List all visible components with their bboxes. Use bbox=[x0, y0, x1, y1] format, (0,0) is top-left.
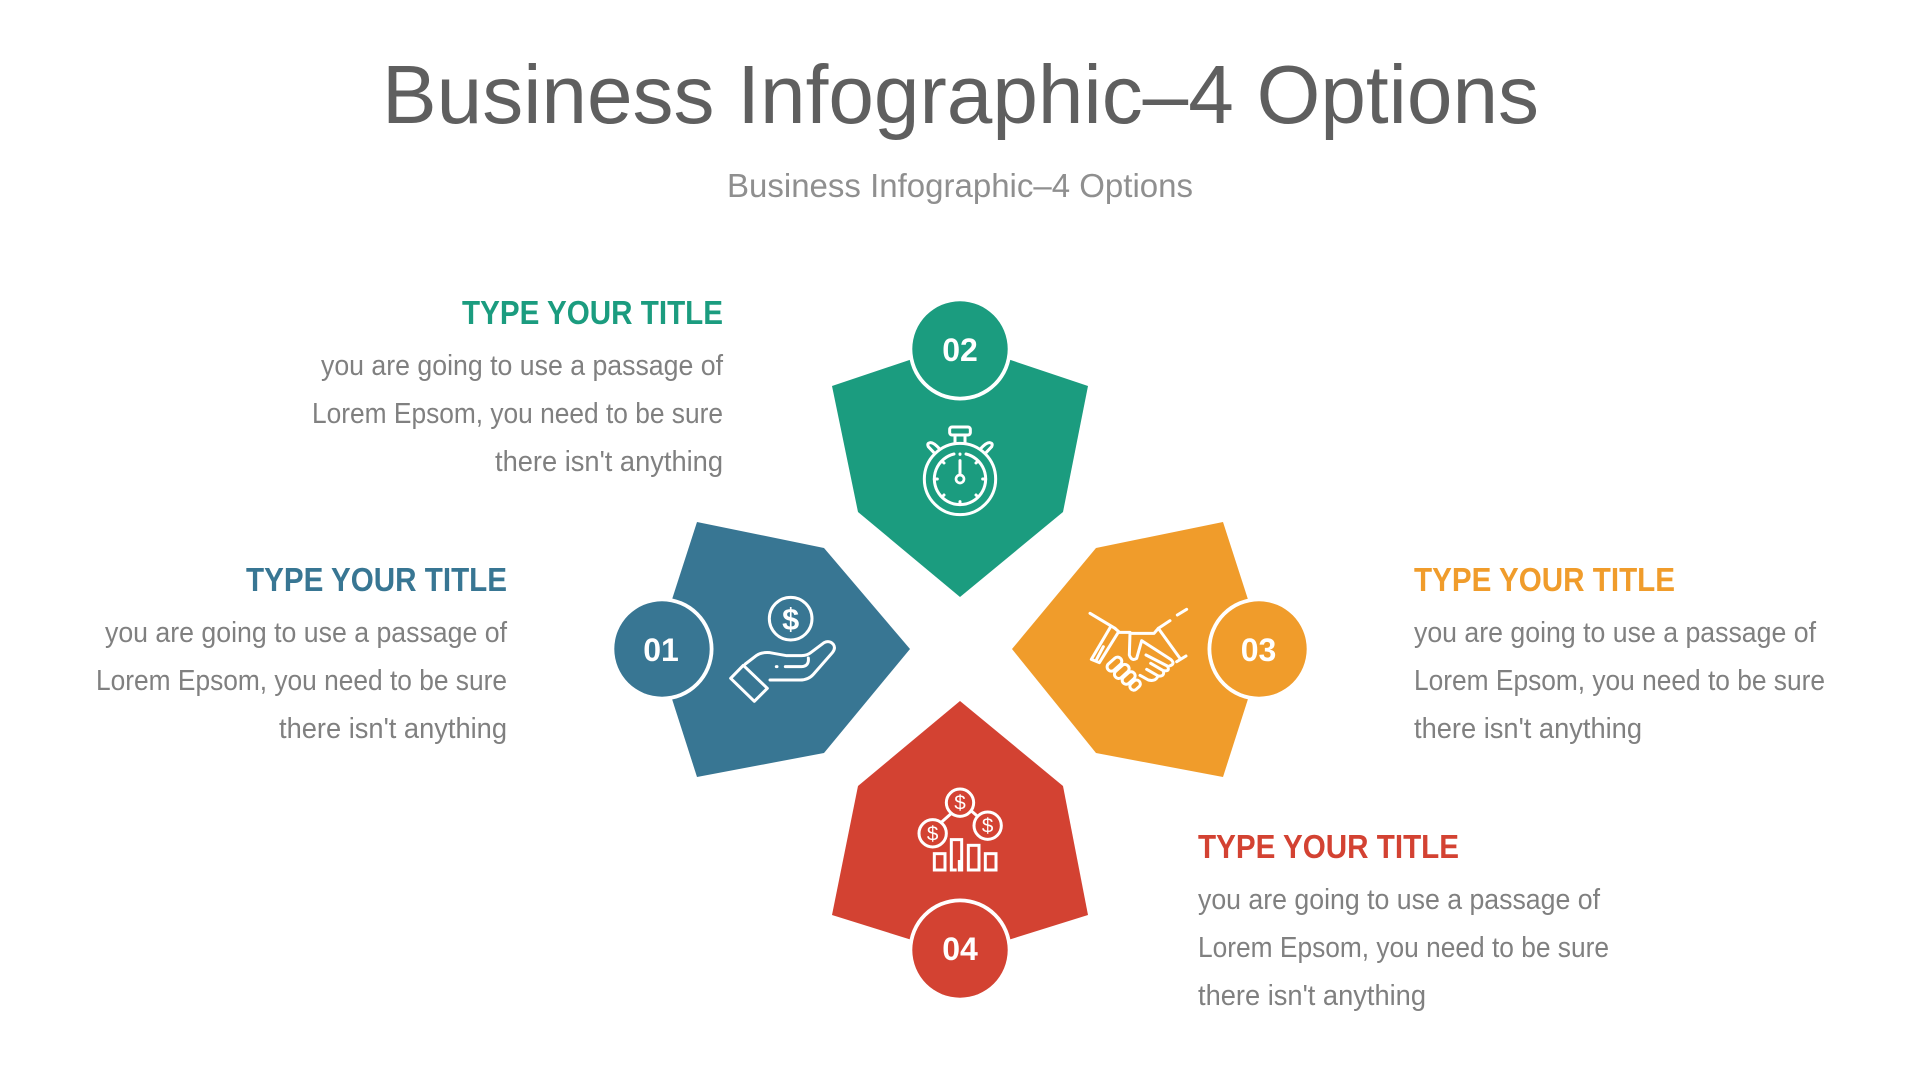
panel: option 01 pentagon bbox=[610, 522, 910, 777]
text block: option 01: you are going to use a passage of bbox=[105, 617, 507, 649]
title: Business Infographic–4 Options bbox=[382, 48, 1539, 141]
icon: financial chart: $ bbox=[954, 792, 966, 815]
icon: financial chart: $ bbox=[927, 822, 939, 845]
text block: option 03: there isn't anything bbox=[1414, 713, 1642, 745]
text block: option 03: Lorem Epsom, you need to be sure bbox=[1414, 665, 1825, 697]
text block: option 03: you are going to use a passage of bbox=[1414, 617, 1816, 649]
text block: option 02: Lorem Epsom, you need to be sure bbox=[312, 398, 723, 430]
text block: option 02 bbox=[312, 294, 723, 478]
text block: option 04: you are going to use a passage of bbox=[1198, 884, 1600, 916]
text block: option 04: TYPE YOUR TITLE bbox=[1198, 828, 1459, 865]
number 03: 03 bbox=[1241, 632, 1276, 668]
text block: option 04 bbox=[1198, 828, 1609, 1012]
text block: option 02: TYPE YOUR TITLE bbox=[462, 294, 723, 331]
panel: option 03 pentagon bbox=[1012, 522, 1310, 777]
panel: option 04 pentagon bbox=[832, 701, 1088, 1002]
icon: handshake bbox=[1090, 609, 1187, 692]
icon: stopwatch bbox=[924, 427, 996, 515]
subtitle: Business Infographic–4 Options bbox=[727, 167, 1193, 204]
text block: option 03 bbox=[1414, 561, 1825, 745]
text block: option 01: there isn't anything bbox=[279, 713, 507, 745]
text block: option 04: Lorem Epsom, you need to be sure bbox=[1198, 932, 1609, 964]
text block: option 01 bbox=[96, 561, 507, 745]
panel: option 02 pentagon bbox=[832, 298, 1088, 597]
text block: option 03: TYPE YOUR TITLE bbox=[1414, 561, 1675, 598]
text block: option 02: you are going to use a passage of bbox=[321, 350, 723, 382]
icon: hand holding coin: $ bbox=[782, 602, 799, 636]
text block: option 02: there isn't anything bbox=[495, 446, 723, 478]
number 04: 04 bbox=[942, 931, 978, 967]
text block: option 01: TYPE YOUR TITLE bbox=[246, 561, 507, 598]
icon: financial chart bbox=[919, 789, 1001, 870]
text block: option 01: Lorem Epsom, you need to be sure bbox=[96, 665, 507, 697]
icon: hand holding coin bbox=[731, 597, 834, 701]
number 02: 02 bbox=[942, 332, 978, 368]
number 01: 01 bbox=[643, 632, 679, 668]
icon: financial chart: $ bbox=[982, 815, 994, 838]
text block: option 04: there isn't anything bbox=[1198, 980, 1426, 1012]
